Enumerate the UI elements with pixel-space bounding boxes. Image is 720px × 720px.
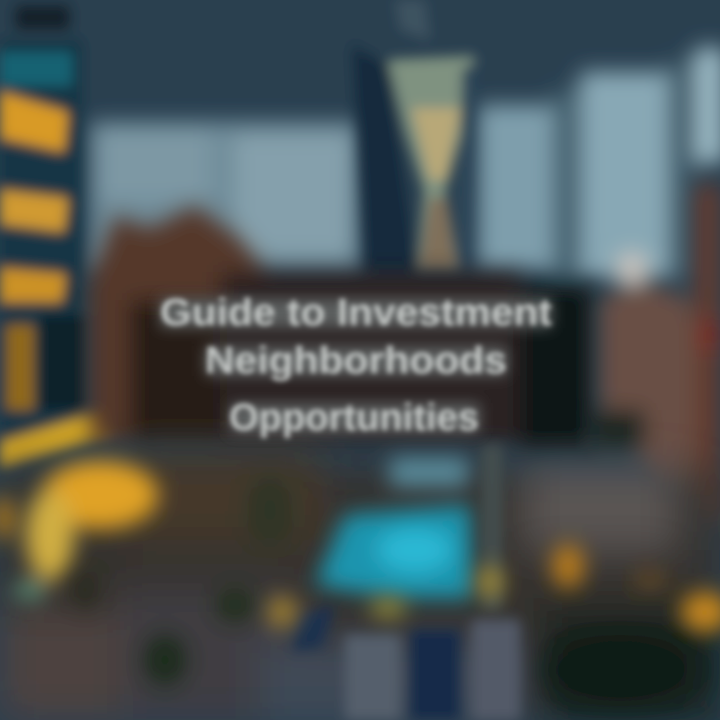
photo: pool (315, 458, 473, 598)
title (160, 292, 552, 439)
photo: right buildings (590, 185, 720, 530)
photo: brown mid buildings (90, 205, 592, 450)
photo: glass facade windows (90, 48, 720, 290)
title glow (160, 298, 552, 433)
photo: warm lights (0, 461, 720, 632)
photo: dark foliage (69, 474, 695, 706)
title: Opportunities (229, 397, 479, 439)
title: Guide to Investment (160, 292, 552, 334)
title: Neighborhoods (205, 340, 507, 382)
photo: central tower (352, 0, 476, 275)
photo: left building (0, 5, 112, 468)
photo: dark blue pathway posts (292, 445, 520, 720)
photo: lower ground (0, 450, 720, 720)
